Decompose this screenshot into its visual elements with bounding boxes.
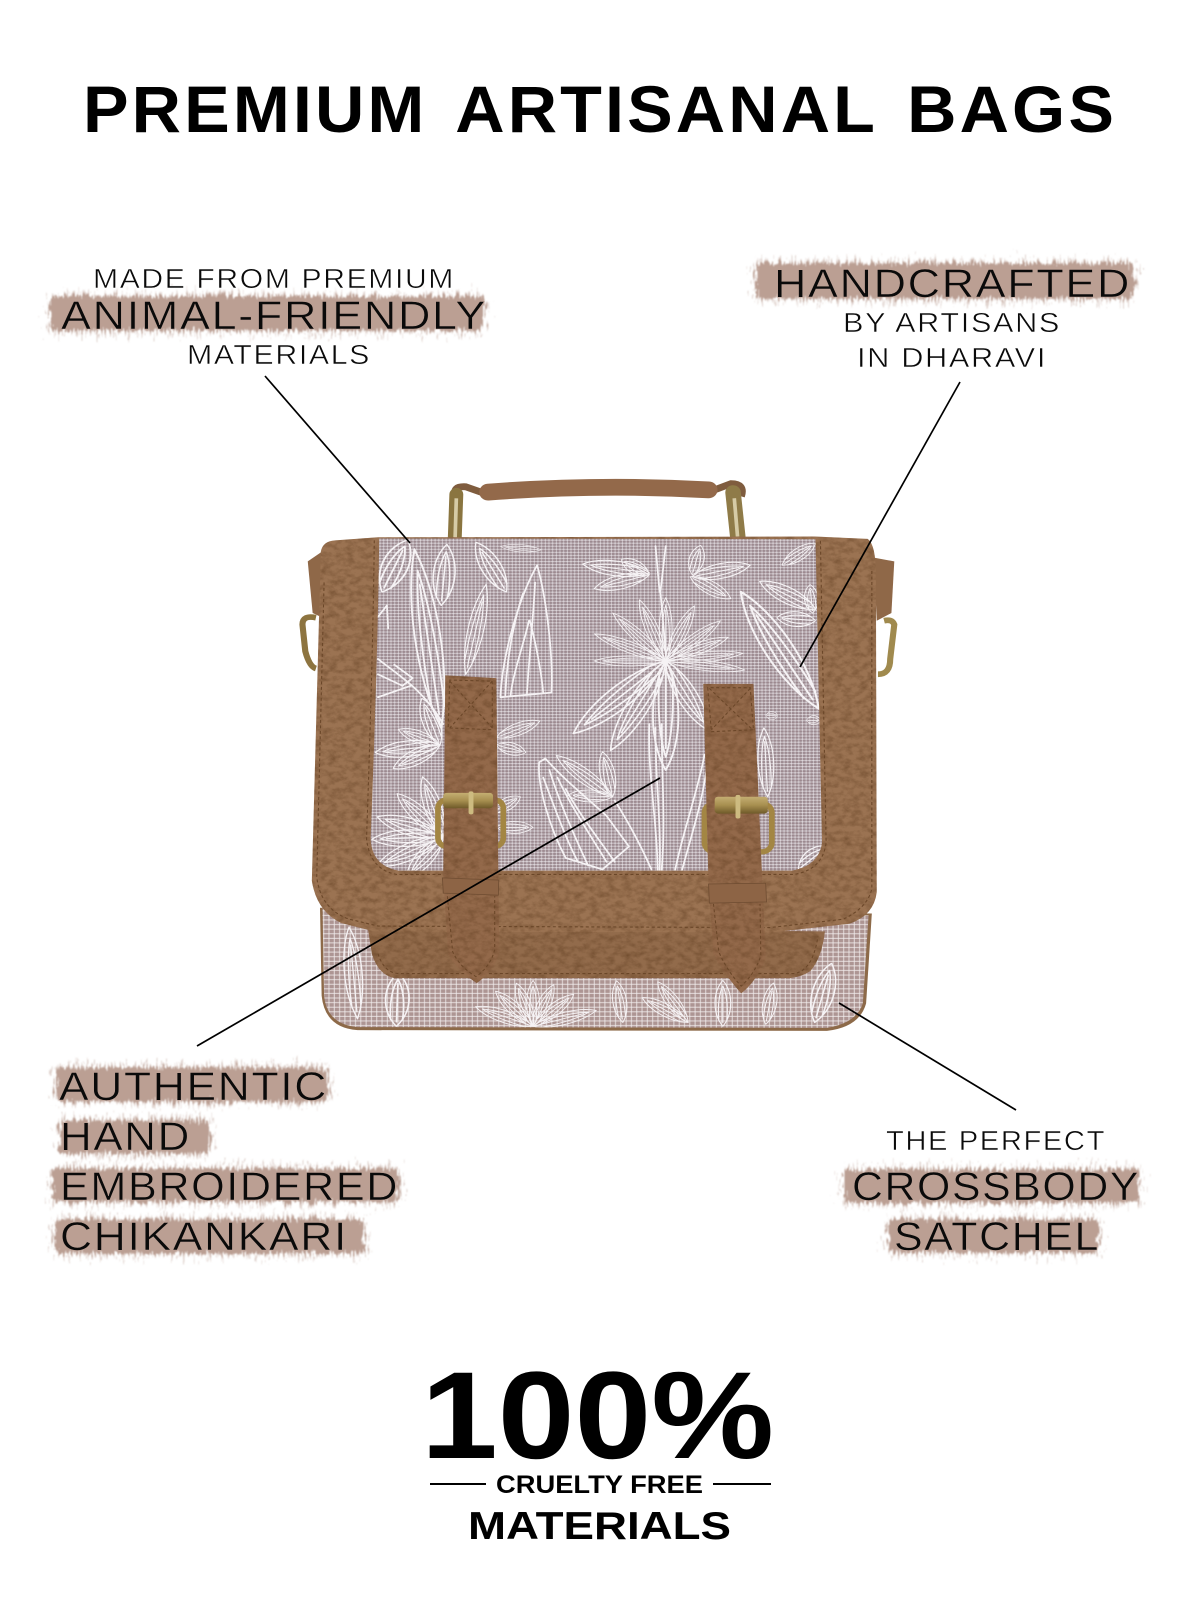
callout text line: crossbody: CROSSBODY — [852, 1165, 1140, 1209]
leather flap — [312, 537, 877, 933]
big stat: 100%: 100% — [421, 1347, 774, 1485]
product illustration: satchel bag — [302, 484, 894, 1032]
upper left leaves and blades — [378, 540, 412, 593]
stems — [649, 546, 708, 870]
brush highlight: hand — [60, 1120, 210, 1154]
brush highlight: satchel — [888, 1219, 1099, 1253]
top leaves — [582, 560, 650, 578]
callout text line: made from premium: MADE FROM PREMIUM — [93, 263, 455, 294]
fabric panel with chikankari embroidery — [370, 535, 834, 883]
pointer line: chikankari to embroidery — [197, 778, 660, 1046]
callout: handcrafted by artisans — [756, 262, 1134, 373]
callout: authentic hand embroidered chikankari — [52, 1065, 399, 1259]
callout text line: in dharavi: IN DHARAVI — [857, 342, 1047, 373]
badge: 100% cruelty free materials — [421, 1347, 774, 1548]
lower left flower — [372, 829, 444, 848]
left rule — [430, 1483, 486, 1485]
pointer line: materials to bag top — [265, 376, 410, 543]
buckle bars — [443, 791, 768, 819]
brush highlight: handcrafted — [756, 263, 1134, 299]
inner flap — [368, 928, 825, 978]
label: materials: MATERIALS — [468, 1505, 731, 1548]
right rule — [713, 1483, 771, 1485]
left strap — [442, 675, 499, 983]
lower center leaves — [539, 758, 629, 869]
back side tabs and strap rings — [302, 552, 894, 674]
buckle rings — [438, 800, 772, 852]
callout text line: satchel: SATCHEL — [894, 1215, 1100, 1259]
title: PREMIUM ARTISANAL BAGS — [83, 72, 1117, 146]
callout text line: animal-friendly: ANIMAL-FRIENDLY — [61, 294, 487, 338]
callout text line: the perfect: THE PERFECT — [886, 1125, 1106, 1156]
sublabel: cruelty free: CRUELTY FREE — [496, 1471, 703, 1499]
brush highlight: embroidered — [52, 1168, 399, 1202]
callout: animal-friendly materials — [50, 263, 487, 370]
callout text line: embroidered: EMBROIDERED — [60, 1165, 399, 1209]
callout text line: hand: HAND — [60, 1115, 191, 1159]
callout text line: by artisans: BY ARTISANS — [843, 307, 1061, 338]
right leaves — [740, 590, 820, 710]
callout: the perfect crossbody satchel — [844, 1125, 1140, 1259]
handle and metal loops — [455, 484, 742, 540]
pointer line: handcrafted to fabric — [800, 382, 960, 667]
pointer line: crossbody to pocket — [839, 1003, 1016, 1110]
callout text line: chikankari: CHIKANKARI — [60, 1215, 348, 1259]
lower front pocket — [320, 908, 872, 1032]
callout text line: authentic: AUTHENTIC — [59, 1065, 328, 1109]
large flower — [594, 656, 666, 666]
right strap — [703, 684, 767, 993]
callout text line: handcrafted: HANDCRAFTED — [774, 262, 1131, 306]
brush highlight: crossbody — [844, 1169, 1139, 1203]
brush highlight: authentic — [56, 1067, 328, 1102]
brush highlight: chikankari — [55, 1219, 364, 1254]
brush highlight: animal-friendly — [50, 296, 484, 331]
left mid flower — [374, 740, 439, 758]
callout text line: materials: MATERIALS — [187, 339, 371, 370]
